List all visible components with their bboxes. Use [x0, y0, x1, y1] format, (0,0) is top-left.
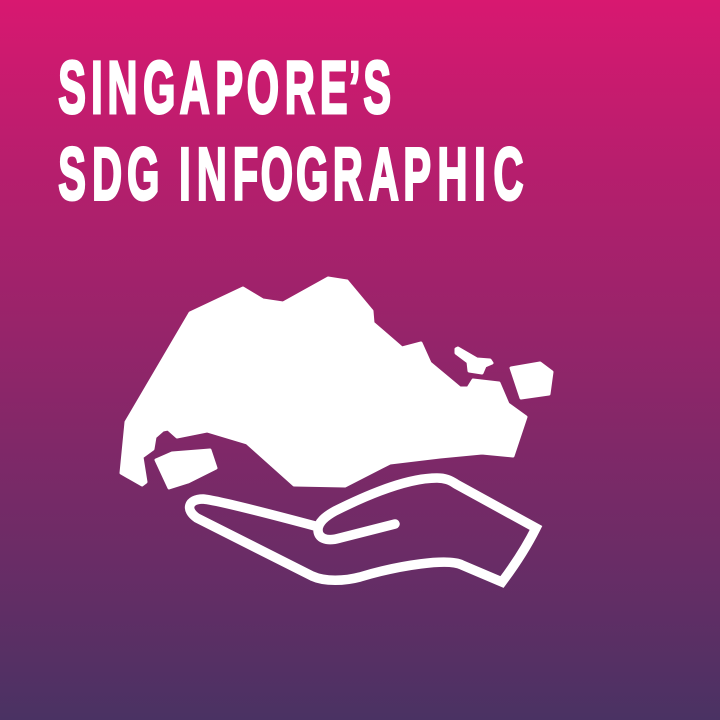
icon: map of Singapore [121, 278, 552, 488]
Pulau Ubin [456, 348, 492, 373]
southern island [156, 450, 216, 488]
title line 1: SINGAPORE’S [58, 47, 391, 129]
title line 2: SDG INFOGRAPHIC [58, 133, 523, 215]
main island [121, 278, 526, 486]
Pulau Tekong [511, 363, 552, 398]
icon: open hand [190, 478, 536, 582]
title [58, 47, 523, 215]
